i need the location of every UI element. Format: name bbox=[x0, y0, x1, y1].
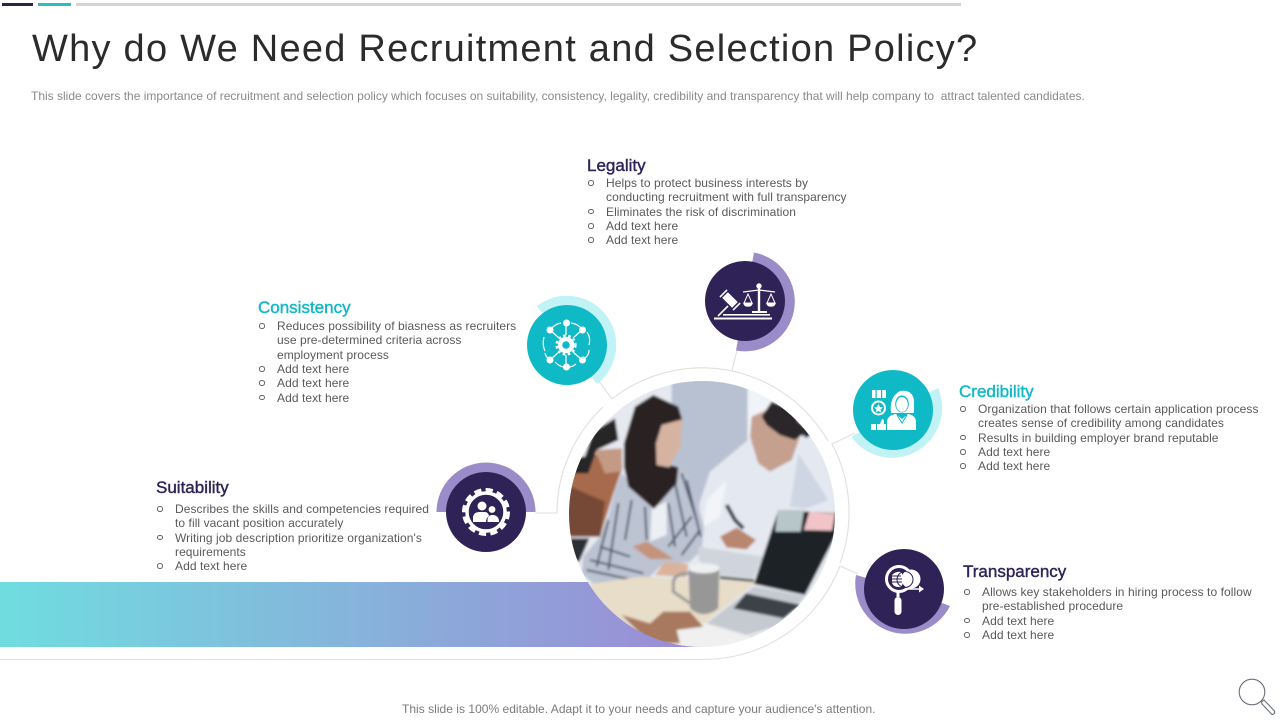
text block: legality: Legality bbox=[587, 156, 646, 175]
text block: consistency: Consistency bbox=[258, 298, 351, 317]
papers bbox=[698, 547, 763, 578]
man right shirt bbox=[698, 433, 807, 511]
text block: suitability bbox=[156, 478, 429, 573]
text block: consistency: Add text here bbox=[277, 362, 349, 376]
lower hand bbox=[622, 612, 703, 643]
icon: transparency magnifier bbox=[855, 549, 950, 634]
text block: credibility: Results in building employer brand reputable bbox=[978, 431, 1219, 445]
text block: consistency: Add text here bbox=[277, 391, 349, 405]
text block: consistency: Add text here bbox=[277, 376, 349, 390]
text block: credibility: creates sense of credibility among candidates bbox=[978, 416, 1224, 430]
text block: consistency: Reduces possibility of biasness as recruiters bbox=[277, 319, 516, 333]
woman blouse bbox=[582, 463, 704, 583]
gradient band bbox=[0, 582, 700, 647]
text block: transparency: Add text here bbox=[982, 614, 1054, 628]
icon: consistency gear network bbox=[527, 296, 616, 385]
text block: consistency bbox=[258, 298, 516, 405]
footer note: This slide is 100% editable. Adapt it to your needs and capture your audience's attention. bbox=[402, 702, 876, 716]
icon: legality scales and gavel bbox=[705, 252, 795, 351]
subtitle: This slide covers the importance of recruitment and selection policy which focuses on suitability, consistency, legality, credibility and transparency that will help company to attract talented candidates. bbox=[31, 89, 1085, 103]
top progress bars bbox=[2, 3, 961, 6]
text block: suitability: requirements bbox=[175, 545, 246, 559]
left man bbox=[572, 452, 624, 536]
text block: suitability: Describes the skills and competencies required bbox=[175, 502, 429, 516]
woman hands bbox=[633, 542, 674, 559]
text block: transparency: Transparency bbox=[963, 562, 1066, 581]
text block: consistency: use pre-determined criteria across bbox=[277, 333, 461, 347]
title: Why do We Need Recruitment and Selection Policy? bbox=[32, 28, 978, 70]
laptop screen bbox=[754, 510, 837, 595]
text block: legality: Add text here bbox=[606, 219, 678, 233]
man pen hand bbox=[720, 528, 756, 549]
woman hair and face bbox=[624, 395, 682, 509]
text block: transparency bbox=[963, 562, 1252, 642]
text block: credibility: Credibility bbox=[959, 382, 1034, 401]
text block: transparency: pre-established procedure bbox=[982, 599, 1123, 613]
laptop base bbox=[707, 587, 805, 635]
text block: credibility: Add text here bbox=[978, 459, 1050, 473]
text block: suitability: Writing job description prioritize organization's bbox=[175, 531, 422, 545]
icon: suitability gear with people bbox=[436, 462, 536, 552]
text block: legality: Add text here bbox=[606, 233, 678, 247]
text block: transparency: Add text here bbox=[982, 628, 1054, 642]
text block: legality bbox=[587, 156, 847, 247]
text block: suitability: Add text here bbox=[175, 559, 247, 573]
text block: credibility: Organization that follows certain application process bbox=[978, 402, 1259, 416]
text block: credibility: Add text here bbox=[978, 445, 1050, 459]
icon: credibility professional with medal bbox=[852, 370, 942, 458]
ring and connector lines bbox=[0, 350, 858, 660]
icon: magnifying glass corner mark bbox=[1239, 679, 1275, 714]
text block: legality: conducting recruitment with full transparency bbox=[606, 190, 847, 204]
text block: consistency: employment process bbox=[277, 348, 389, 362]
mug bbox=[688, 568, 719, 614]
text block: legality: Eliminates the risk of discrimination bbox=[606, 205, 796, 219]
table bbox=[590, 576, 756, 644]
text block: transparency: Allows key stakeholders in hiring process to follow bbox=[982, 585, 1252, 599]
text block: credibility bbox=[959, 382, 1259, 473]
text block: suitability: to fill vacant position accurately bbox=[175, 516, 343, 530]
photo: team at a laptop bbox=[563, 377, 843, 657]
text block: legality: Helps to protect business interests by bbox=[606, 176, 808, 190]
text block: suitability: Suitability bbox=[156, 478, 229, 497]
man right head bbox=[750, 410, 802, 472]
